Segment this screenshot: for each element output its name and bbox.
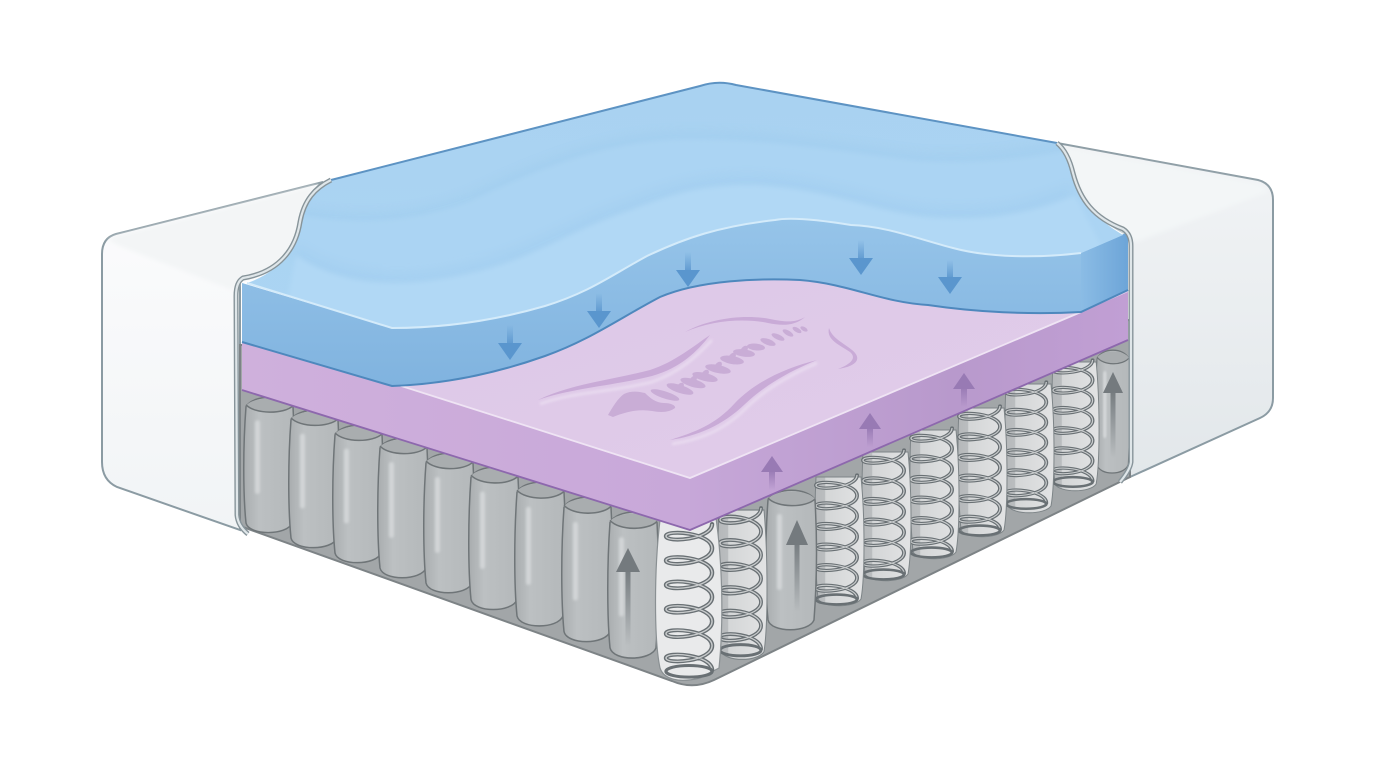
arrow up 1 xyxy=(761,456,783,490)
blue layer: top surface with waves xyxy=(247,83,1130,340)
purple layer: left side xyxy=(242,334,690,530)
purple layer: right side xyxy=(690,292,1128,530)
downward pressure arrows in blue layer xyxy=(498,240,962,360)
arrow down 1 xyxy=(498,325,522,360)
arrow down 3 xyxy=(676,252,700,287)
arrow down 5 xyxy=(938,260,962,294)
coil base tray xyxy=(240,320,1130,685)
blue layer: side xyxy=(242,219,1081,386)
vertebrae xyxy=(650,325,808,403)
body contour curves xyxy=(538,317,857,440)
arrow up 3 xyxy=(953,373,975,407)
arrow down 4 xyxy=(849,240,873,275)
pocketed coil with arrow column xyxy=(766,490,816,630)
arrow up 2 xyxy=(859,413,881,447)
blue layer: right end shading xyxy=(1081,232,1128,312)
blue layer: lower edge xyxy=(242,279,1128,386)
end pocket right xyxy=(1095,350,1130,473)
illustration: layered mattress cutaway xyxy=(101,82,1274,686)
arrow up: front pocket xyxy=(616,548,640,646)
pocketed coils: left row xyxy=(244,397,658,658)
arrow up: end pocket xyxy=(1103,372,1123,458)
contour highlights xyxy=(540,340,817,444)
purple layer edges xyxy=(242,312,1128,530)
exposed coil at front corner xyxy=(656,518,722,680)
spine impression in the purple foam xyxy=(538,317,857,444)
mattress cover: left white block xyxy=(102,182,323,530)
cover seam lines around cut xyxy=(236,143,1131,534)
upward support arrows in purple layer xyxy=(761,373,975,490)
blue layer: highlight edge xyxy=(247,219,1081,328)
exposed coils: right row xyxy=(815,360,1099,606)
pelvis xyxy=(608,392,675,417)
arrow down 2 xyxy=(587,293,611,328)
arrow up: middle pocket xyxy=(786,520,808,612)
arrows in grey pockets xyxy=(616,372,1123,646)
mattress cover: right white block xyxy=(1057,143,1273,477)
purple layer: top surface xyxy=(242,200,1128,478)
exposed coil behind corner xyxy=(718,508,767,659)
